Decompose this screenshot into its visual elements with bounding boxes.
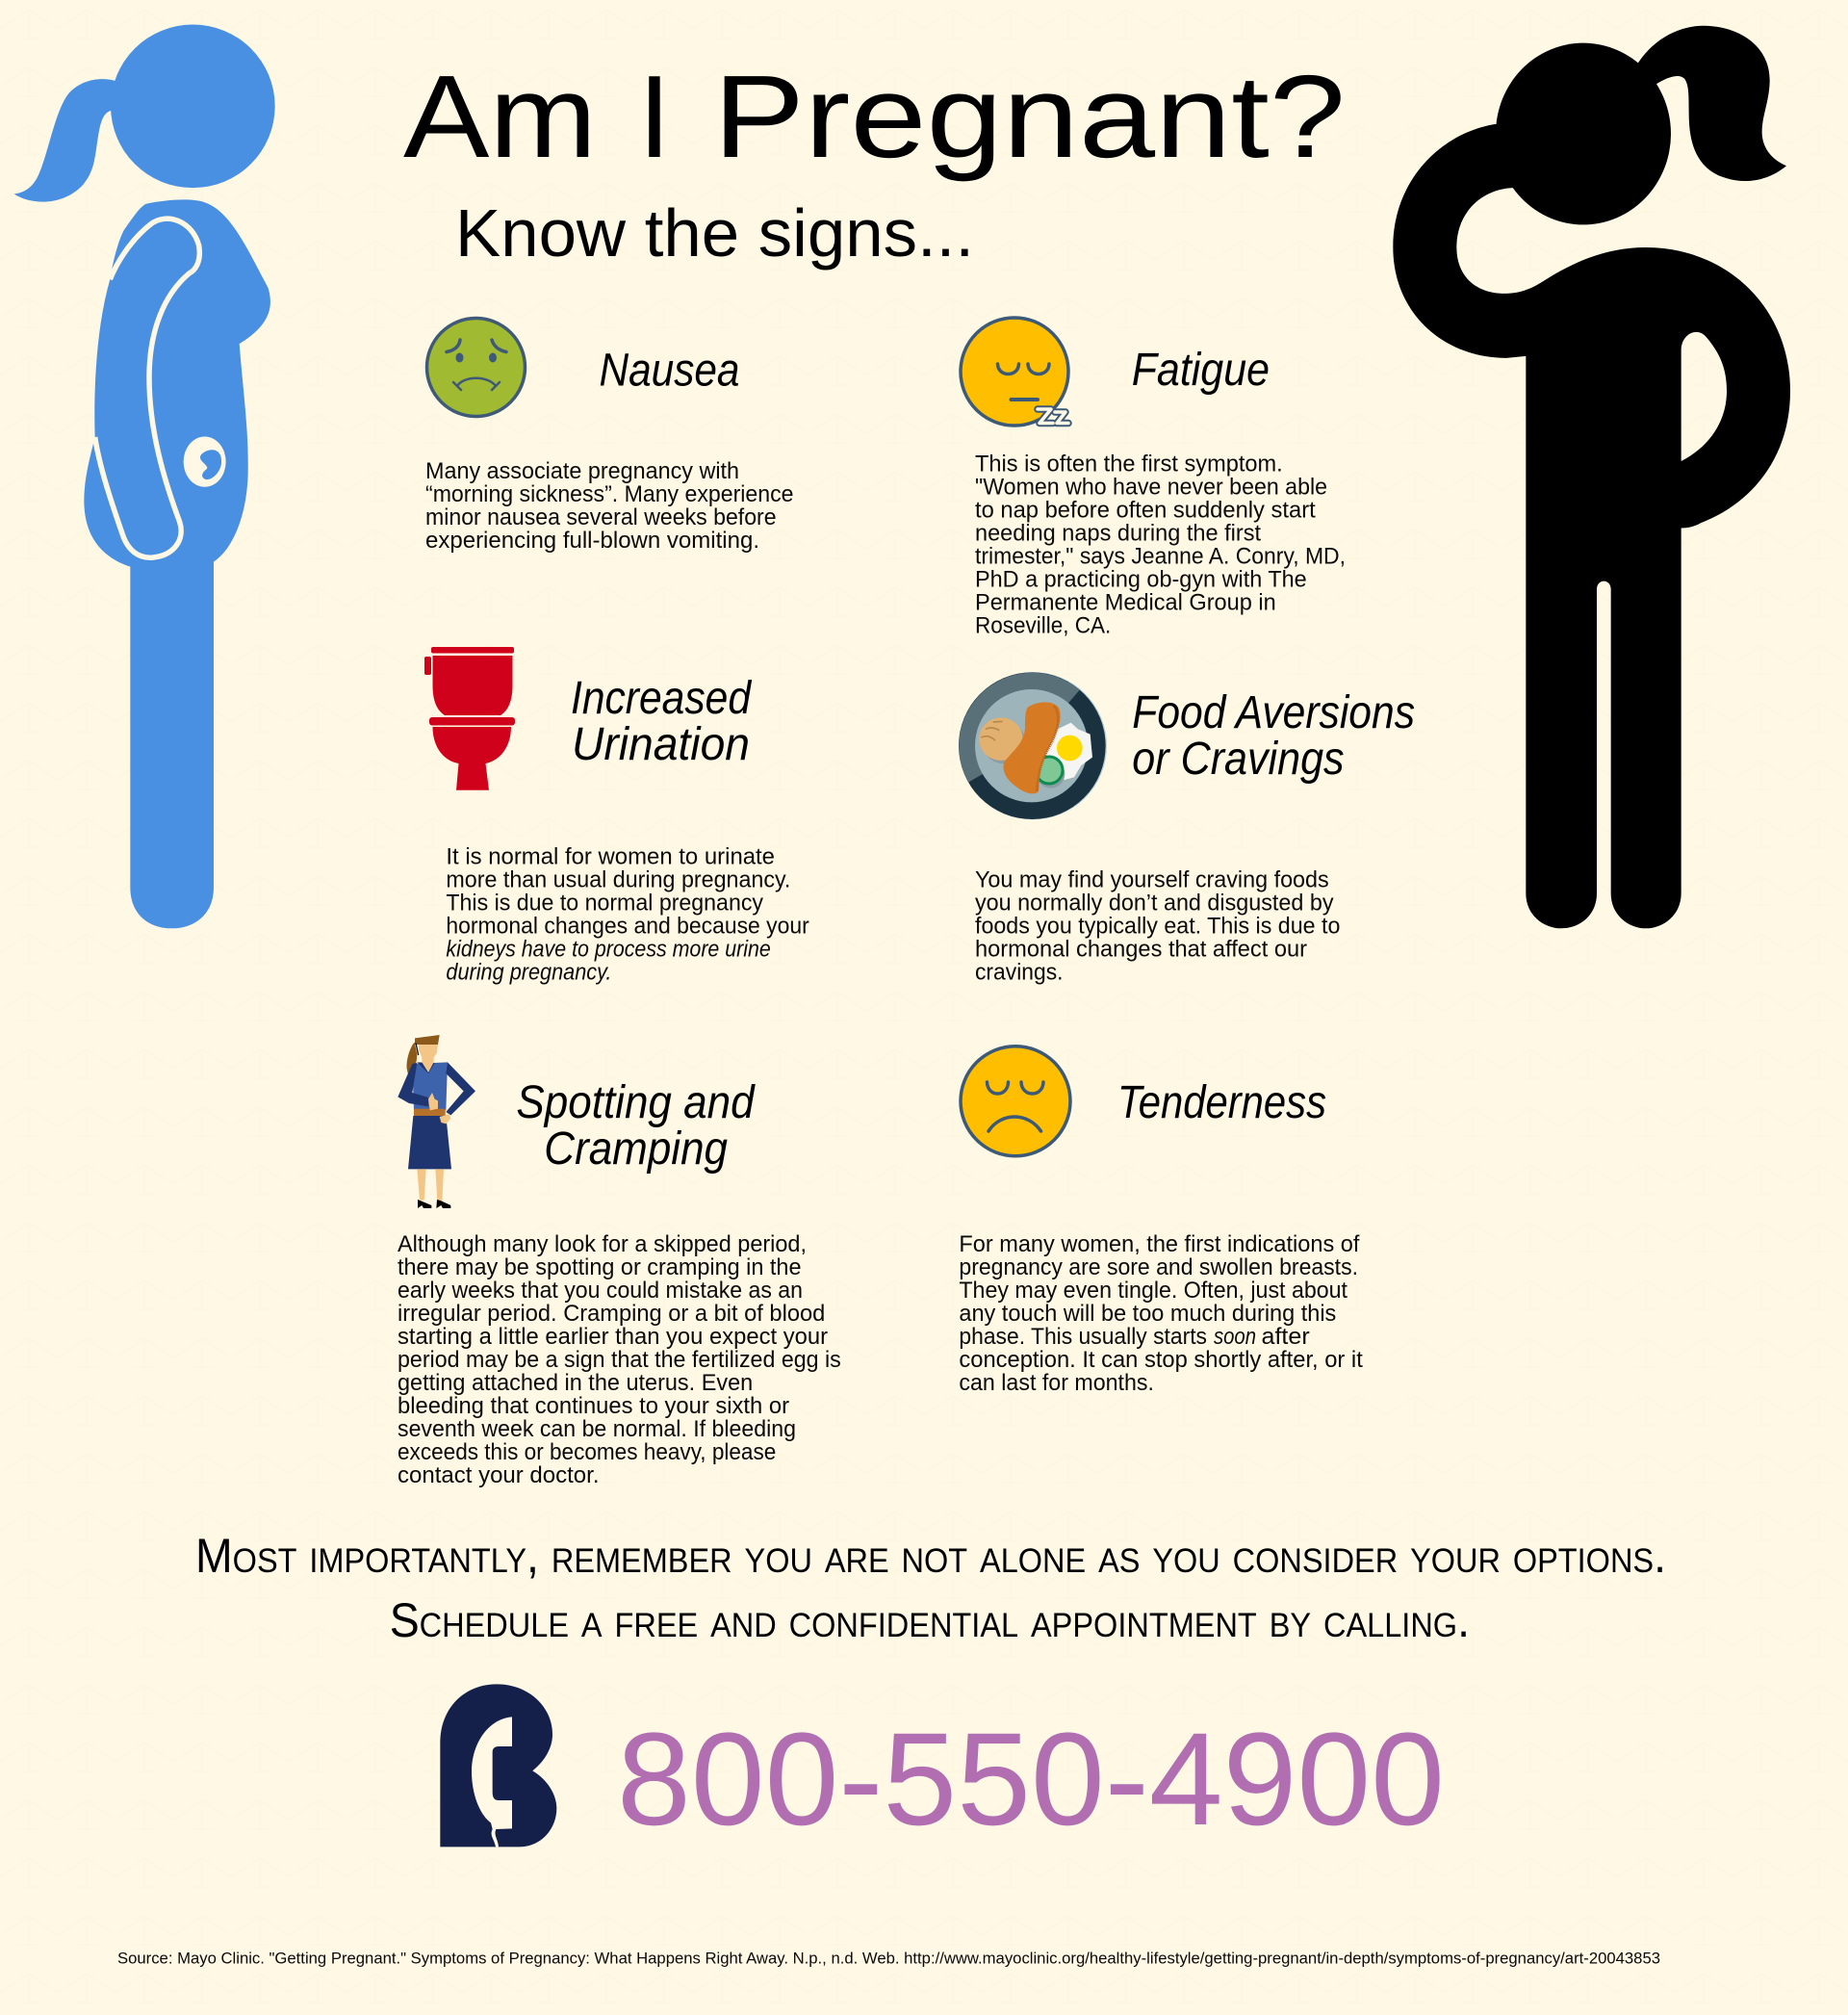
title: Am bbox=[403, 51, 597, 182]
heading: Fatigue bbox=[1132, 345, 1270, 396]
icon: green nauseous face bbox=[427, 318, 526, 416]
heading: or Cravings bbox=[1132, 734, 1345, 785]
body text: needing naps during the first bbox=[975, 520, 1261, 546]
body text: hormonal changes and because your bbox=[446, 913, 809, 939]
body text: It is normal for women to urinate bbox=[446, 843, 775, 869]
body text: after bbox=[1261, 1324, 1310, 1350]
icon: plate of food bbox=[959, 672, 1107, 819]
body text: there may be spotting or cramping in the bbox=[398, 1254, 801, 1280]
figure: pregnant woman, blue side profile bbox=[14, 25, 275, 928]
source citation: Source: Mayo Clinic. "Getting Pregnant." Symptoms of Pregnancy: What Happens Right Away. N.p., n.d. Web. http://www.mayoclinic.org/healthy-lifestyle/getting-pregnant/in-depth/symptoms-of-pregnancy/art-20043853 bbox=[117, 1949, 1660, 1967]
body text: to nap before often suddenly start bbox=[975, 497, 1316, 523]
body text: PhD a practicing ob-gyn with The bbox=[975, 566, 1307, 592]
body text bbox=[959, 1231, 1363, 1396]
heading: Food Aversions bbox=[1132, 687, 1415, 738]
body text: foods you typically eat. This is due to bbox=[975, 913, 1340, 939]
body text: You may find yourself craving foods bbox=[975, 866, 1329, 892]
figure: woman with hand on head, black silhouette bbox=[1393, 26, 1790, 928]
body text: Although many look for a skipped period, bbox=[398, 1231, 807, 1257]
body text: This is due to normal pregnancy bbox=[446, 890, 763, 916]
body text: Permanente Medical Group in bbox=[975, 589, 1276, 615]
icon: telephone bbox=[440, 1684, 556, 1847]
body text bbox=[425, 458, 793, 554]
body text: pregnancy are sore and swollen breasts. bbox=[959, 1254, 1358, 1280]
body text: can last for months. bbox=[959, 1370, 1154, 1396]
pregnant body and leg bbox=[84, 199, 270, 928]
panel: food aversions or cravings bbox=[959, 672, 1415, 985]
body text: kidneys have to process more urine bbox=[446, 936, 771, 962]
body text: you normally don’t and disgusted by bbox=[975, 890, 1334, 916]
closing message: Schedule a free and confidential appointment by calling. bbox=[390, 1593, 1470, 1647]
body text: For many women, the first indications of bbox=[959, 1231, 1360, 1257]
head bbox=[1496, 43, 1671, 224]
heading: Increased bbox=[571, 673, 752, 724]
body text: soon bbox=[1214, 1324, 1256, 1350]
icon: sad face bbox=[961, 1046, 1070, 1156]
body text: minor nausea several weeks before bbox=[425, 504, 777, 530]
heading: Spotting and bbox=[516, 1077, 756, 1128]
panel: increased urination bbox=[424, 647, 809, 985]
heading bbox=[571, 673, 752, 770]
body text bbox=[975, 451, 1346, 638]
body, arms and legs bbox=[1393, 124, 1790, 928]
body text: bleeding that continues to your sixth or bbox=[398, 1393, 789, 1419]
body text: seventh week can be normal. If bleeding bbox=[398, 1416, 796, 1442]
body text: hormonal changes that affect our bbox=[975, 936, 1307, 962]
closing message bbox=[195, 1529, 1666, 1647]
heading bbox=[1132, 687, 1415, 785]
icon: sleepy face with Zz bbox=[961, 318, 1068, 426]
body text: This is often the first symptom. bbox=[975, 451, 1283, 477]
body text: They may even tingle. Often, just about bbox=[959, 1278, 1348, 1304]
icon: standing woman in blue dress bbox=[398, 1035, 475, 1208]
body text: more than usual during pregnancy. bbox=[446, 866, 790, 892]
body text: phase. This usually starts bbox=[959, 1324, 1207, 1350]
body text: trimester," says Jeanne A. Conry, MD, bbox=[975, 543, 1346, 569]
panel: nausea bbox=[425, 318, 793, 554]
body text: contact your doctor. bbox=[398, 1462, 599, 1488]
subtitle: Know the signs... bbox=[455, 195, 974, 271]
body text: Many associate pregnancy with bbox=[425, 458, 739, 484]
body text: Roseville, CA. bbox=[975, 612, 1111, 638]
heading: Nausea bbox=[599, 345, 739, 397]
body text bbox=[446, 843, 809, 985]
head and ponytail bbox=[14, 25, 275, 202]
body text: “morning sickness”. Many experience bbox=[425, 481, 793, 507]
heading: Cramping bbox=[544, 1124, 728, 1175]
body text: during pregnancy. bbox=[446, 959, 611, 985]
title: I bbox=[638, 51, 671, 182]
body text: irregular period. Cramping or a bit of blood bbox=[398, 1301, 825, 1327]
closing message: Most importantly, remember you are not alone as you consider your options. bbox=[195, 1529, 1666, 1583]
womb with fetus bbox=[184, 436, 226, 487]
body text: cravings. bbox=[975, 959, 1063, 985]
body text: conception. It can stop shortly after, or it bbox=[959, 1347, 1363, 1373]
ponytail bbox=[1636, 26, 1786, 181]
body text: starting a little earlier than you expect your bbox=[398, 1324, 828, 1350]
body text: "Women who have never been able bbox=[975, 474, 1327, 500]
heading: Tenderness bbox=[1117, 1077, 1326, 1128]
panel: fatigue bbox=[961, 318, 1346, 638]
body text bbox=[398, 1231, 841, 1488]
body text: experiencing full-blown vomiting. bbox=[425, 528, 759, 554]
phone number: 800-550-4900 bbox=[617, 1706, 1445, 1853]
panel: tenderness bbox=[959, 1046, 1363, 1396]
arm outline bbox=[95, 219, 199, 557]
body text: period may be a sign that the fertilized egg is bbox=[398, 1347, 841, 1373]
title bbox=[403, 51, 1346, 182]
title: Pregnant? bbox=[713, 51, 1346, 182]
body text: getting attached in the uterus. Even bbox=[398, 1370, 753, 1396]
icon: red toilet bbox=[424, 647, 515, 790]
body text: exceeds this or becomes heavy, please bbox=[398, 1439, 776, 1465]
panel: spotting and cramping bbox=[398, 1035, 841, 1488]
body text: early weeks that you could mistake as an bbox=[398, 1278, 803, 1304]
heading bbox=[516, 1077, 756, 1175]
body text bbox=[975, 866, 1340, 985]
heading: Urination bbox=[572, 719, 750, 770]
body text: any touch will be too much during this bbox=[959, 1301, 1336, 1327]
